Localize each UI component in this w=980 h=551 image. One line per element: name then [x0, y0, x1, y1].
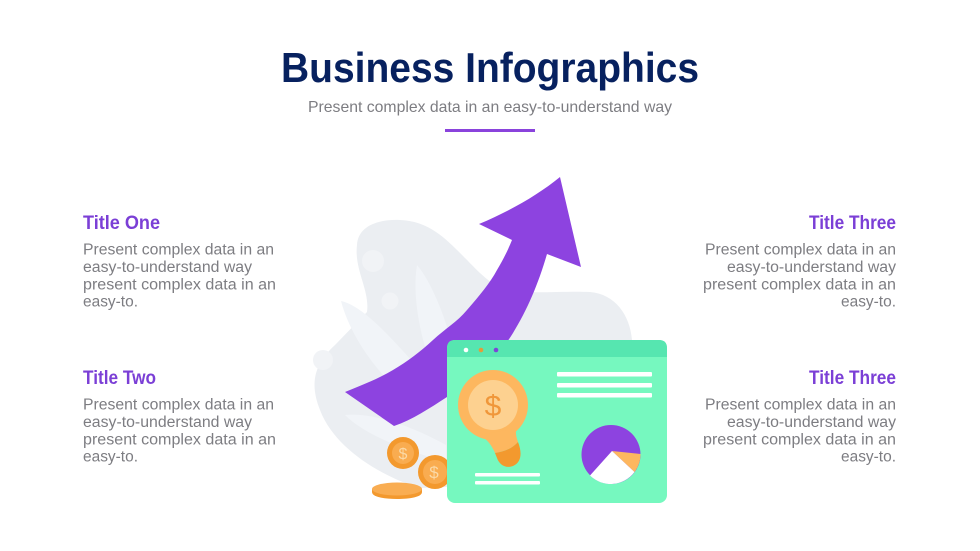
text block: title three lower: Present complex data in an: [705, 396, 896, 414]
text block: title one: Title One: [83, 213, 160, 234]
text block: title three lower: easy-to-understand way: [727, 414, 896, 431]
text block: title one: easy-to-understand way: [83, 259, 252, 276]
background blob with leaves: [313, 220, 632, 488]
text block: title three upper: easy-to.: [841, 294, 896, 310]
icon: light bulb with dollar sign: $: [485, 390, 502, 423]
text block: title one: easy-to.: [83, 294, 138, 310]
coins: [372, 437, 452, 499]
text block: title three lower: Title Three: [809, 368, 896, 389]
text block: title two: Title Two: [83, 368, 156, 389]
text block: title three upper: [703, 213, 896, 310]
text lines lower: [475, 473, 540, 484]
text block: title two: easy-to-understand way: [83, 414, 252, 431]
window dots: [464, 348, 498, 352]
icon: light bulb with dollar sign: [458, 370, 528, 467]
text block: title three upper: Title Three: [809, 213, 896, 234]
window header bar: [447, 340, 667, 357]
text block: title two: Present complex data in an: [83, 396, 274, 414]
text block: title one: present complex data in an: [83, 276, 276, 294]
text block: title two: [83, 368, 276, 466]
text block: title three upper: present complex data in an: [703, 276, 896, 294]
text block: title two: present complex data in an: [83, 432, 276, 448]
text block: title three upper: easy-to-understand way: [727, 259, 896, 276]
text block: title three upper: Present complex data in an: [705, 242, 896, 258]
title: Business Infographics: [281, 44, 699, 91]
subtitle: Present complex data in an easy-to-understand way: [308, 99, 672, 116]
text block: title one: [83, 213, 276, 310]
coins: $: [399, 446, 408, 463]
title underline: [445, 129, 535, 132]
text lines upper: [557, 372, 652, 398]
browser window: [447, 340, 667, 503]
arrow: [345, 177, 581, 426]
text block: title three lower: easy-to.: [841, 448, 896, 466]
text block: title one: Present complex data in an: [83, 242, 274, 258]
pie chart: [582, 425, 641, 484]
text block: title two: easy-to.: [83, 448, 138, 466]
coins: $: [429, 463, 439, 482]
text block: title three lower: present complex data in an: [703, 432, 896, 448]
text block: title three lower: [703, 368, 896, 466]
